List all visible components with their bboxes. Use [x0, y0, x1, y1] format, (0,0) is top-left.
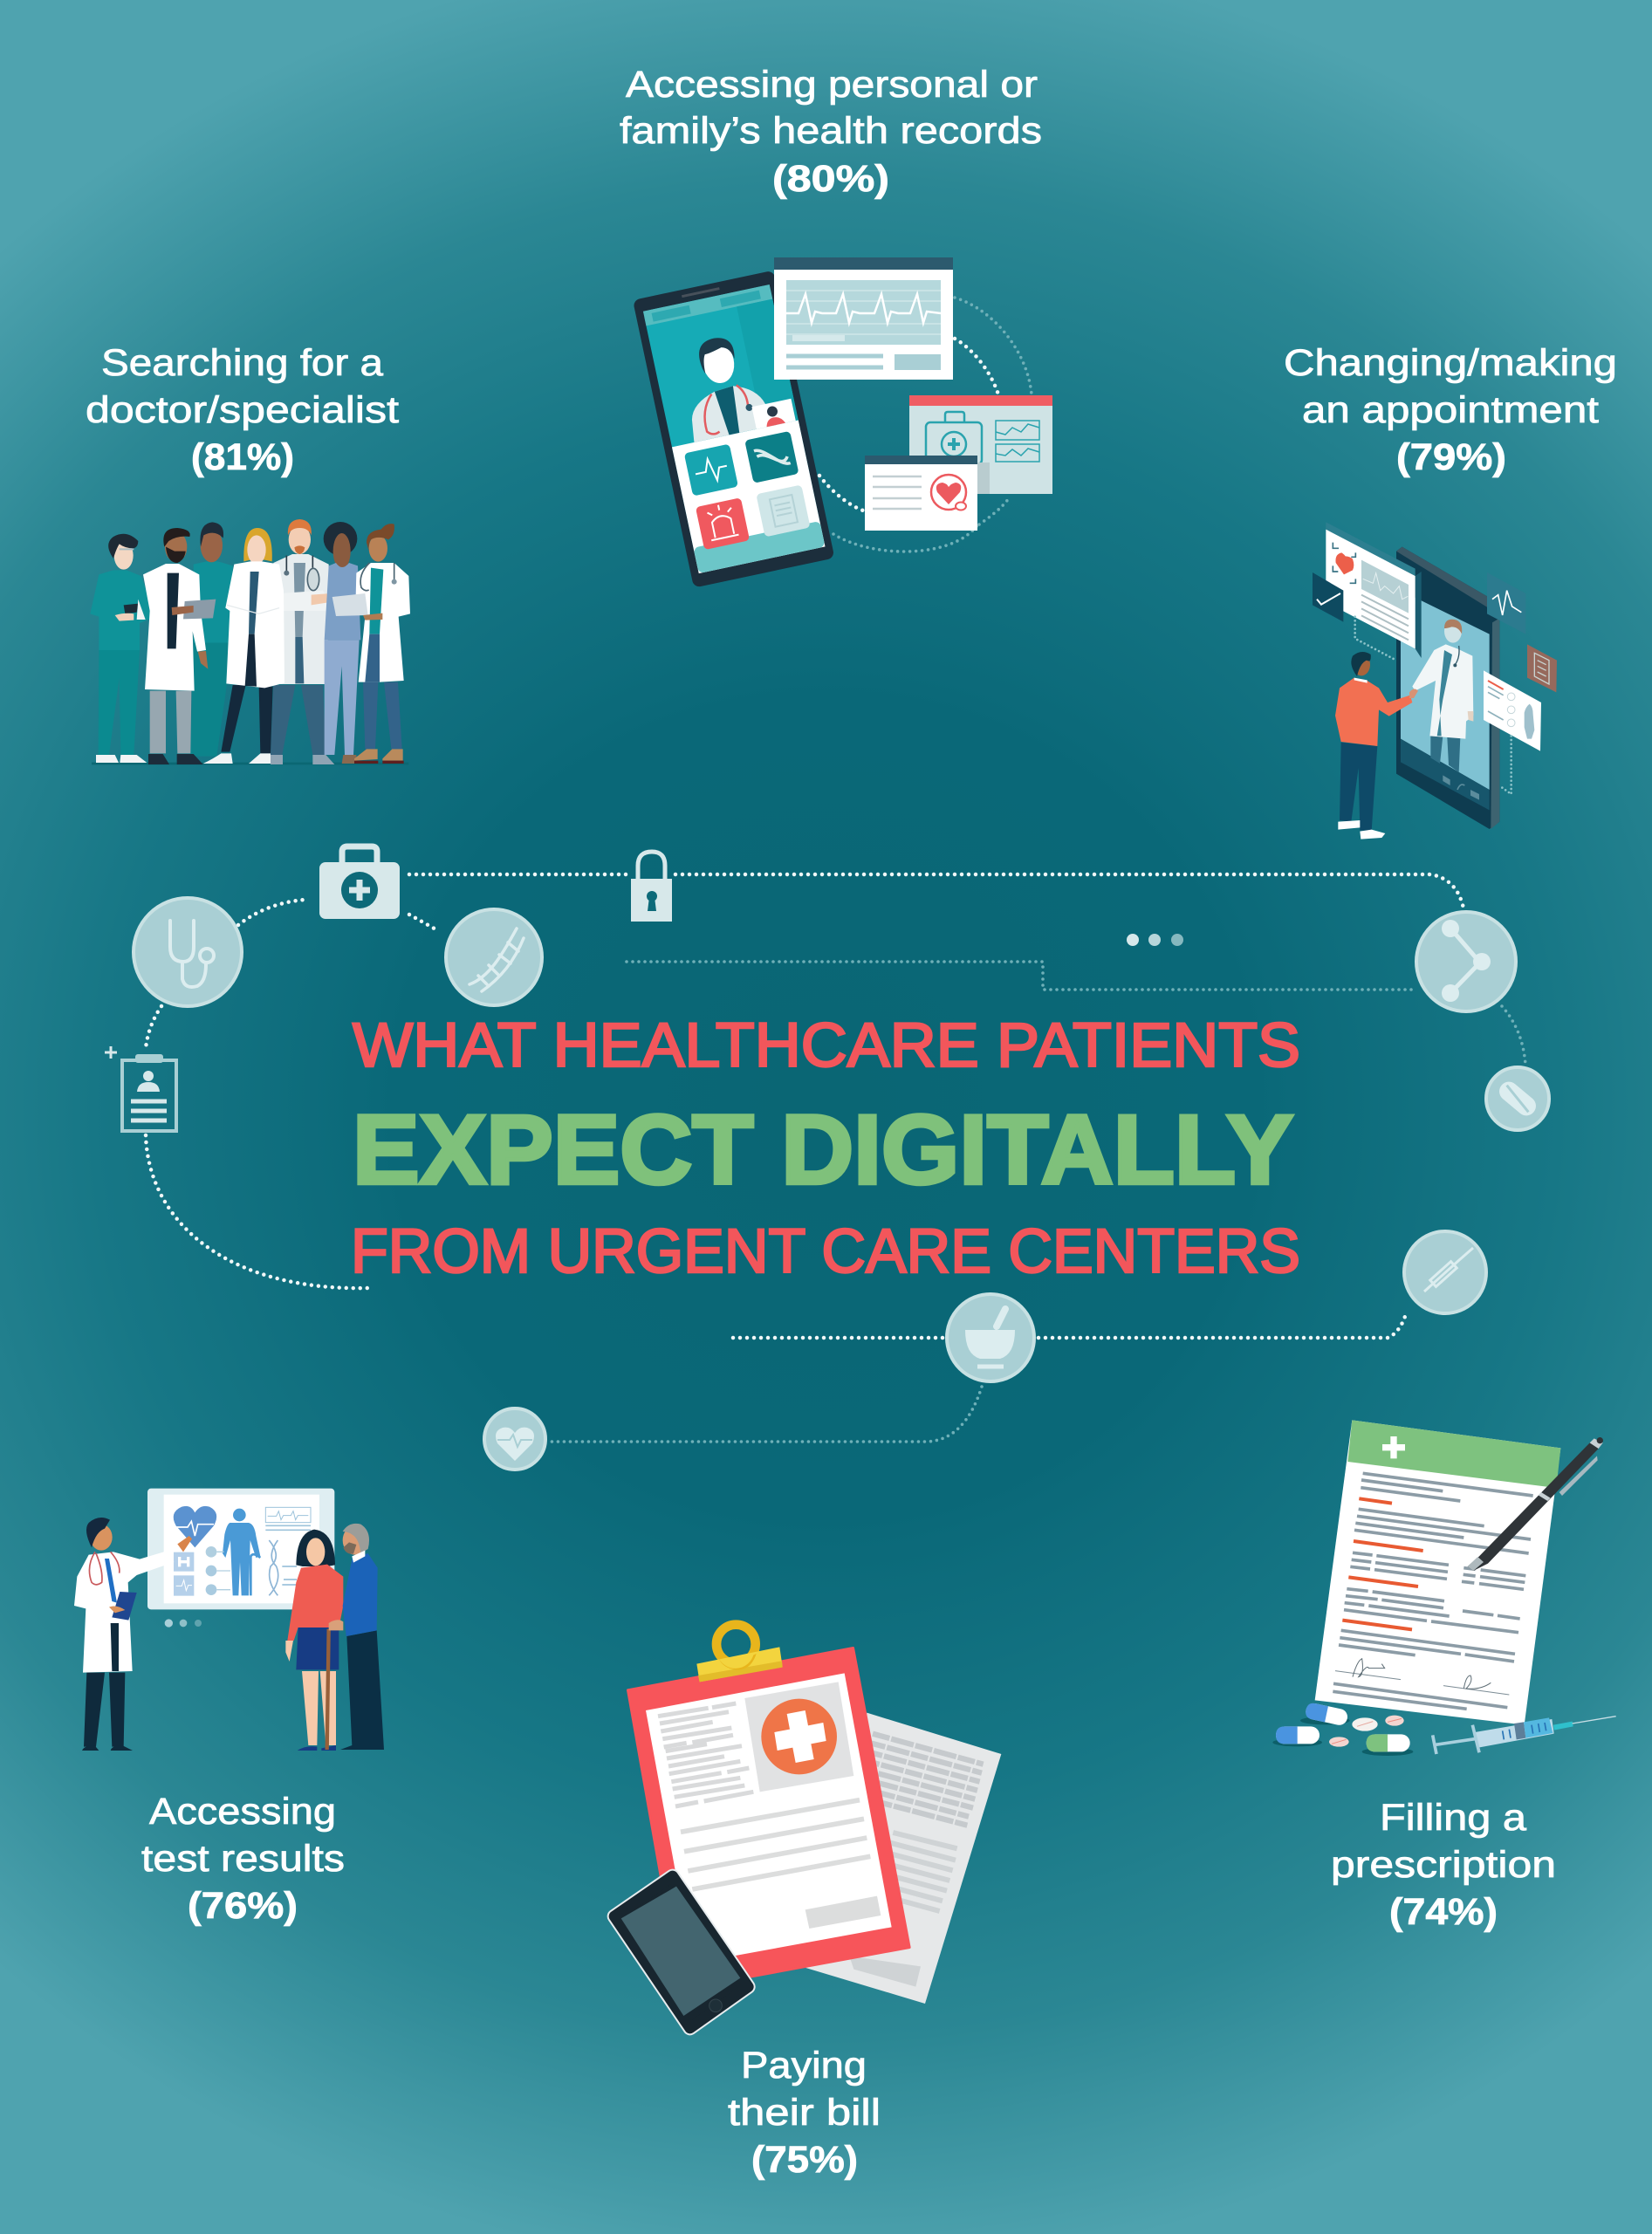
three dots: [1127, 934, 1183, 946]
label: changing or making appointment: an appointment: [1302, 389, 1599, 431]
medical record card: [1326, 522, 1422, 658]
illustration: clipboard, papers and smartphone: [614, 1625, 1001, 2028]
clipboard: [627, 1648, 909, 1990]
doctor 2, bearded: [143, 528, 216, 764]
label: changing or making appointment: [1284, 342, 1617, 478]
doctor 7, teal shirt: [332, 524, 410, 764]
doctor 5, red hair: [271, 519, 334, 764]
title: FROM URGENT CARE CENTERS: [351, 1217, 1300, 1286]
label: searching for a doctor: (81%): [191, 436, 294, 478]
illustration: doctor explaining test results to patients: [74, 1489, 384, 1751]
icon: stethoscope circle: [134, 898, 242, 1006]
label: accessing test results: (76%): [188, 1885, 298, 1927]
label: accessing health records: Accessing personal or: [626, 64, 1038, 106]
title: [351, 1011, 1300, 1286]
doctor 6, afro: [324, 522, 360, 764]
label: paying their bill: their bill: [728, 2092, 881, 2134]
dotted network paths: [146, 874, 1525, 1442]
icon: mortar and pestle circle: [947, 1294, 1034, 1381]
doctor 3, back row: [190, 522, 233, 757]
large phone: [1396, 547, 1499, 829]
label: filling a prescription: [1331, 1797, 1556, 1933]
icon: syringe circle: [1404, 1231, 1486, 1313]
card: medical kit: [909, 395, 1052, 494]
document tile: [1527, 644, 1557, 692]
board indicator dots: [165, 1619, 202, 1628]
illustration: group of doctors: [90, 519, 410, 764]
icon: padlock: [631, 852, 672, 922]
label: filling a prescription: prescription: [1331, 1844, 1556, 1886]
label: filling a prescription: Filling a: [1380, 1797, 1526, 1839]
smartphone: [614, 1876, 748, 2028]
body chart card: [1484, 670, 1541, 751]
label: accessing test results: Accessing: [149, 1791, 336, 1833]
label: searching for a doctor: Searching for a: [101, 342, 383, 384]
icon: pill circle: [1486, 1067, 1549, 1130]
label: accessing test results: test results: [141, 1838, 345, 1880]
icon: DNA circle: [446, 909, 542, 1005]
clip: [696, 1625, 783, 1682]
label: paying their bill: Paying: [741, 2045, 867, 2087]
label: searching for a doctor: doctor/specialist: [86, 389, 399, 431]
label: changing or making appointment: Changing/making: [1284, 342, 1617, 384]
prescription sheet: [1315, 1420, 1560, 1725]
label: paying their bill: (75%): [751, 2139, 858, 2181]
label: changing or making appointment: (79%): [1396, 436, 1506, 478]
icon: clipboard with person: [105, 1046, 176, 1131]
card: ECG chart: [774, 257, 953, 380]
presenting doctor: [74, 1518, 192, 1751]
label: accessing health records: [620, 64, 1042, 200]
woman patient: [285, 1530, 343, 1751]
man patient: [329, 1524, 384, 1750]
on-screen doctor: [1412, 620, 1473, 772]
icon: heart circle: [484, 1408, 545, 1470]
illustration: prescription with pen, pills and syringe: [1272, 1420, 1616, 1756]
card: heart record: [865, 456, 990, 531]
dotted connectors: [1355, 617, 1511, 794]
icon: medical kit: [319, 846, 400, 919]
doctor 4, blonde: [203, 528, 284, 764]
illustration: phone with health record cards: [633, 257, 1052, 588]
label: accessing health records: (80%): [772, 158, 889, 200]
label: paying their bill: [728, 2045, 881, 2181]
pills: [1272, 1702, 1413, 1756]
dotted connectors: [819, 298, 1032, 552]
pen: [1468, 1437, 1603, 1571]
checkmark card: [1313, 572, 1343, 622]
app tiles: [684, 431, 811, 550]
doctor on screen: [674, 326, 796, 442]
label: accessing test results: [141, 1791, 345, 1927]
back paper: [805, 1713, 1001, 2004]
title: EXPECT DIGITALLY: [353, 1095, 1293, 1204]
label: accessing health records: family’s health records: [620, 110, 1042, 152]
doctor 1, green sweater: [90, 534, 155, 763]
icon: share circle: [1416, 912, 1516, 1011]
label: filling a prescription: (74%): [1389, 1891, 1498, 1933]
ECG card: [1487, 572, 1525, 634]
display board: [147, 1489, 334, 1609]
patient: [1335, 652, 1418, 839]
illustration: patient shaking hands with doctor on phone: [1313, 522, 1557, 839]
syringe: [1433, 1717, 1616, 1754]
phone: [633, 271, 834, 588]
title: WHAT HEALTHCARE PATIENTS: [353, 1011, 1300, 1080]
label: searching for a doctor: [86, 342, 399, 478]
